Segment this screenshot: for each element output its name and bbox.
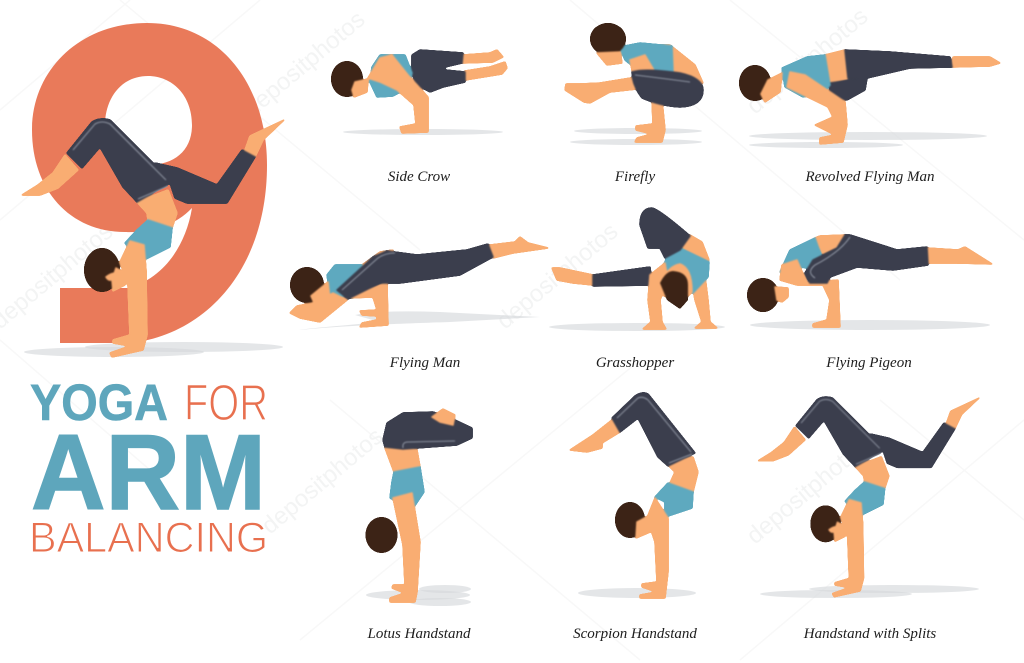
big number 9 bbox=[32, 23, 267, 343]
pose: firefly bbox=[565, 23, 703, 185]
grasshopper caption: Grasshopper bbox=[596, 355, 674, 371]
watermark: depositphotos bbox=[742, 3, 873, 120]
watermark: depositphotos bbox=[492, 218, 623, 335]
side crow figure bbox=[331, 50, 507, 133]
scorpion handstand figure bbox=[570, 393, 698, 598]
flying pigeon caption: Flying Pigeon bbox=[825, 355, 912, 371]
revolved flying man figure bbox=[739, 50, 1000, 144]
main figure shadow bbox=[24, 342, 283, 357]
scorpion handstand shadow bbox=[578, 588, 696, 598]
main handstand panel bbox=[22, 119, 284, 357]
scorpion handstand caption: Scorpion Handstand bbox=[573, 626, 697, 642]
main figure: handstand with splits bbox=[22, 119, 284, 357]
handstand with splits shadow bbox=[760, 585, 979, 598]
title bbox=[29, 374, 268, 562]
side crow caption: Side Crow bbox=[388, 169, 450, 185]
firefly figure bbox=[565, 23, 703, 142]
pose: scorpion handstand bbox=[570, 393, 698, 642]
flying pigeon shadow bbox=[750, 320, 990, 330]
revolved flying man shadow bbox=[749, 132, 987, 148]
flying pigeon figure bbox=[747, 235, 992, 327]
watermark: depositphotos bbox=[257, 423, 388, 540]
pose: flying man bbox=[290, 237, 548, 371]
pose: grasshopper bbox=[549, 208, 725, 371]
handstand with splits figure bbox=[758, 397, 979, 597]
pose: lotus handstand bbox=[366, 409, 472, 642]
lotus handstand figure bbox=[366, 409, 472, 602]
watermark: depositphotos bbox=[742, 433, 873, 550]
lotus handstand caption: Lotus Handstand bbox=[367, 626, 471, 642]
title: yoga: YOGA bbox=[30, 374, 168, 431]
pose: handstand with splits bbox=[758, 397, 979, 642]
revolved flying man caption: Revolved Flying Man bbox=[804, 169, 935, 185]
watermark bbox=[0, 3, 873, 550]
pose: revolved flying man bbox=[739, 50, 1000, 185]
title: balancing: BALANCING bbox=[29, 514, 268, 562]
flying man shadow bbox=[299, 311, 540, 330]
firefly caption: Firefly bbox=[614, 169, 655, 185]
flying man figure bbox=[290, 237, 548, 327]
firefly shadow bbox=[570, 128, 702, 145]
grasshopper shadow bbox=[549, 323, 725, 331]
side crow shadow bbox=[343, 129, 503, 135]
grasshopper figure bbox=[552, 208, 717, 329]
flying man caption: Flying Man bbox=[389, 355, 460, 371]
pose: flying pigeon bbox=[747, 235, 992, 371]
handstand with splits caption: Handstand with Splits bbox=[803, 626, 936, 642]
watermark: depositphotos bbox=[239, 6, 370, 123]
lotus handstand shadow bbox=[366, 585, 471, 606]
title: for: FOR bbox=[184, 374, 268, 431]
pose: side crow bbox=[331, 50, 507, 185]
title: arm: ARM bbox=[31, 412, 266, 532]
